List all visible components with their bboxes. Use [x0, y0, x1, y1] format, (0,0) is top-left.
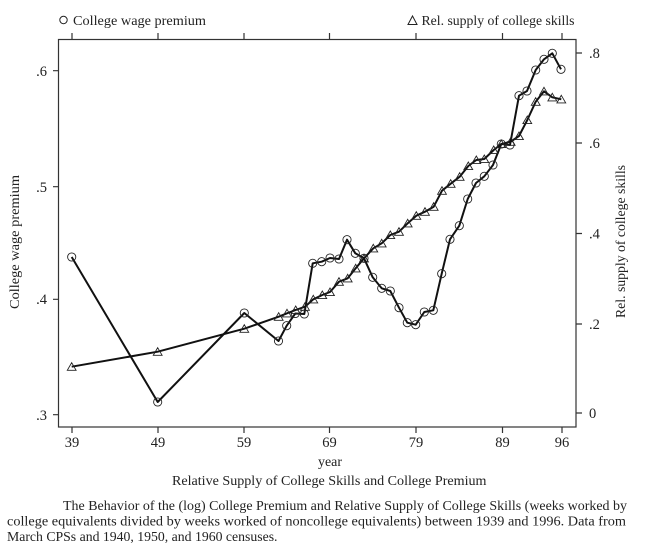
plot frame with axis ticks [53, 33, 582, 433]
series: college wage premium line [68, 49, 565, 406]
legend: college wage premium: College wage premium [73, 14, 206, 29]
left axis title: College wage premium [8, 175, 23, 309]
x axis tick labels: 59 [237, 435, 251, 451]
caption: March CPSs and 1940, 1950, and 1960 censuses. [7, 529, 278, 544]
left axis tick labels [36, 64, 48, 424]
left axis tick labels: .4 [36, 292, 48, 308]
caption [7, 498, 627, 544]
x axis tick labels [65, 435, 569, 451]
right axis tick labels: .4 [589, 226, 601, 242]
caption: college equivalents divided by weeks worked of noncollege equivalents) between 1939 and 1996. Data from [7, 514, 627, 528]
right axis title: Rel. supply of college skills [614, 165, 629, 318]
right axis tick labels: .6 [589, 136, 600, 152]
right axis tick labels: 0 [589, 406, 596, 422]
chart title: Relative Supply of College Skills and College Premium [172, 474, 487, 489]
left axis tick labels: .5 [36, 180, 47, 196]
x axis title: year [318, 454, 343, 469]
series: relative supply of college skills line [67, 87, 566, 370]
x axis tick labels: 89 [495, 435, 510, 451]
left axis tick labels: .3 [36, 408, 47, 424]
caption: The Behavior of the (log) College Premium and Relative Supply of College Skills (weeks worked by [63, 498, 627, 513]
x axis tick labels: 39 [65, 435, 79, 451]
right axis tick labels: .8 [589, 46, 600, 62]
left axis tick labels: .6 [36, 64, 47, 80]
x axis tick labels: 96 [555, 435, 569, 451]
right axis tick labels: .2 [589, 317, 600, 333]
legend: relative supply of college skills: Rel. supply of college skills [422, 14, 574, 29]
markers: college wage premium circles [68, 49, 565, 406]
x axis tick labels: 79 [409, 435, 423, 451]
x axis tick labels: 69 [322, 435, 337, 451]
x axis tick labels: 49 [151, 435, 165, 451]
right axis tick labels [589, 46, 601, 422]
markers: relative supply triangles [67, 87, 566, 370]
